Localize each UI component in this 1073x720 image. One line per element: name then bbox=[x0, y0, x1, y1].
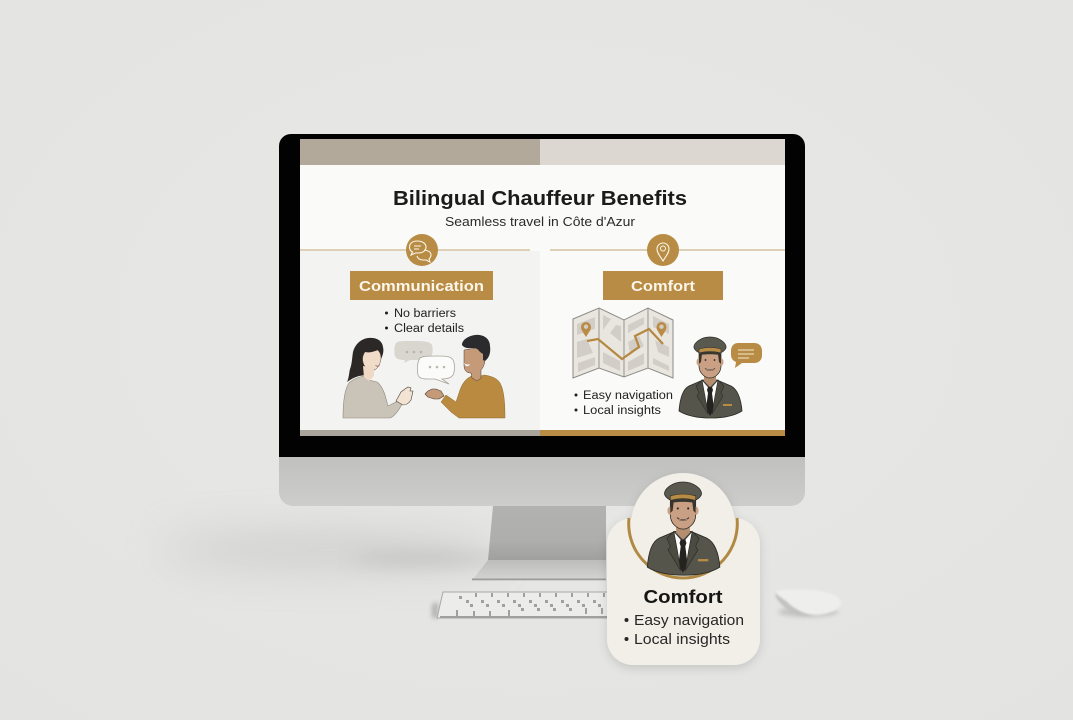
communication bullets bbox=[385, 308, 464, 335]
woman bbox=[343, 338, 413, 418]
comfort bullets: Local insights bbox=[583, 405, 661, 417]
comfort bullets: Easy navigation bbox=[583, 390, 673, 402]
keyboard bbox=[432, 592, 613, 618]
card bullets bbox=[624, 612, 744, 648]
icon: chat bubbles bbox=[406, 234, 438, 266]
comfort bullets bbox=[574, 390, 673, 417]
grey speech bubble bbox=[394, 341, 433, 363]
man bbox=[425, 335, 505, 418]
communication bullets: Clear details bbox=[394, 323, 464, 335]
map pins bbox=[581, 322, 666, 337]
banner: communication bbox=[350, 271, 493, 300]
bottom colour bar bbox=[300, 430, 785, 436]
icon: location pin bbox=[647, 234, 679, 266]
left column background bbox=[300, 251, 540, 431]
mouse bbox=[775, 589, 841, 617]
illustration: two people talking bbox=[343, 335, 505, 418]
callout card: comfort bbox=[607, 473, 760, 665]
communication bullets: No barriers bbox=[394, 308, 456, 320]
monitor bezel bbox=[279, 134, 805, 457]
illustration: folded map bbox=[573, 308, 673, 378]
banner: comfort bbox=[603, 271, 723, 300]
white speech bubble bbox=[417, 356, 454, 384]
gold ring bbox=[629, 518, 737, 578]
stand shadow bbox=[160, 536, 510, 565]
monitor bbox=[279, 134, 805, 506]
chauffeur portrait bbox=[647, 482, 720, 575]
card shape bbox=[607, 473, 760, 665]
illustration: chauffeur bbox=[679, 337, 742, 418]
card bullets: Local insights bbox=[634, 631, 730, 648]
screen bbox=[300, 139, 785, 436]
card bullets: Easy navigation bbox=[634, 612, 744, 629]
map route bbox=[587, 329, 663, 359]
icon: chauffeur speech bubble bbox=[731, 343, 762, 368]
monitor chin bbox=[279, 457, 805, 506]
card heading: Comfort bbox=[644, 586, 722, 607]
banner: comfort: Comfort bbox=[631, 278, 695, 295]
banner: communication: Communication bbox=[359, 278, 484, 295]
top colour bands bbox=[300, 139, 785, 165]
title: Bilingual Chauffeur Benefits bbox=[393, 187, 687, 210]
subtitle: Seamless travel in Côte d'Azur bbox=[445, 215, 635, 229]
monitor stand bbox=[472, 506, 606, 580]
